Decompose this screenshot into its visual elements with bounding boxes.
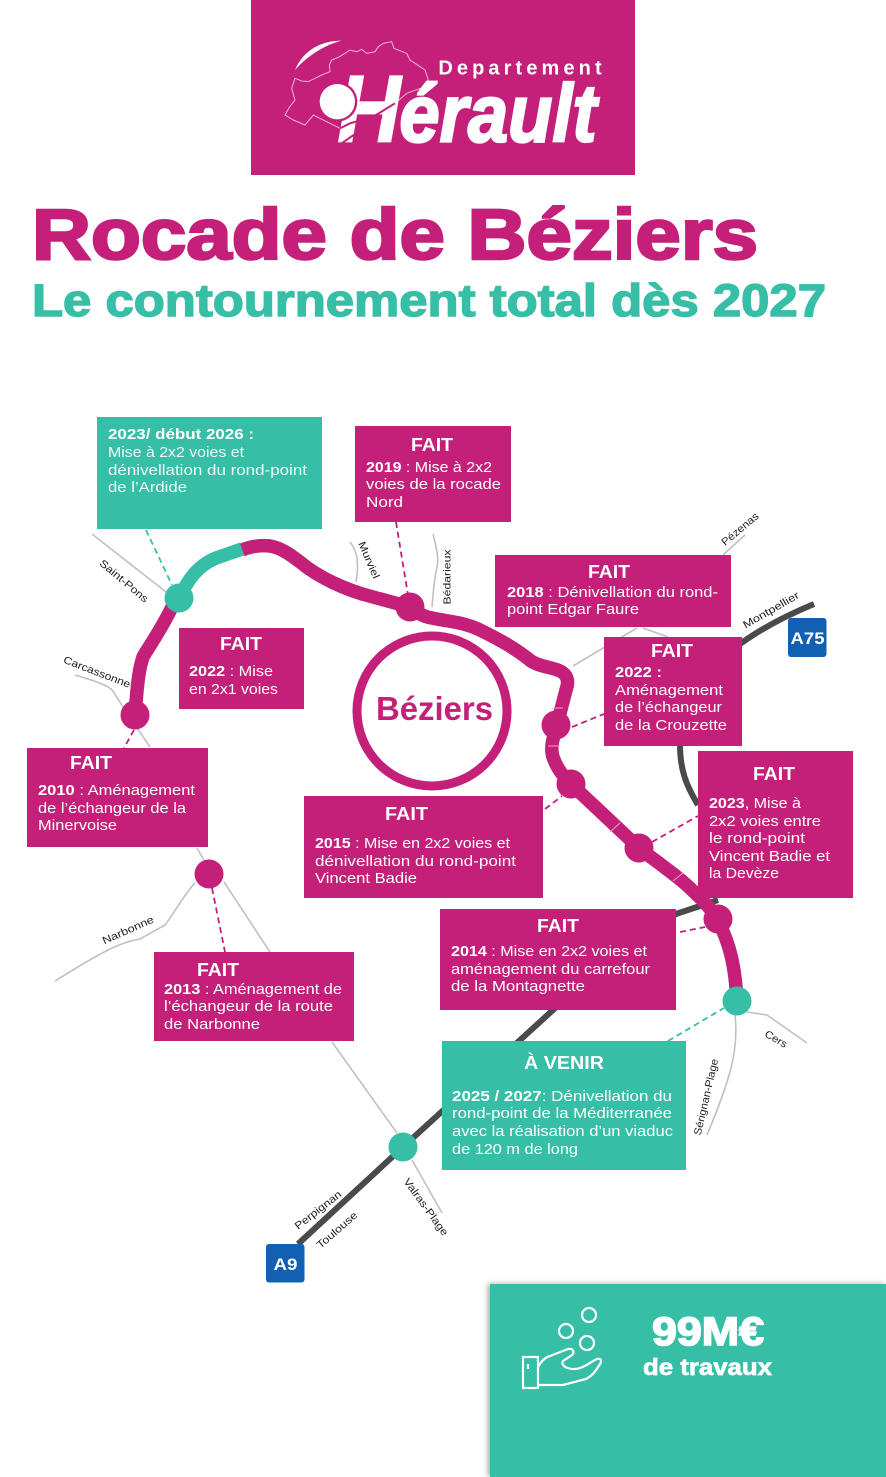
- panel: 2019 rocade Nord: [355, 426, 511, 522]
- panel: 2015 Vincent Badie: FAIT: [385, 803, 429, 824]
- icon: hand with coins: [523, 1308, 601, 1388]
- panel: 2010 la Minervoise: [27, 748, 208, 847]
- panel: 2019 rocade Nord: 2019 : Mise à 2x2: [366, 459, 492, 476]
- panel: 2015 Vincent Badie: [304, 796, 543, 898]
- panel: 2019 rocade Nord: voies de la rocade: [366, 476, 501, 493]
- panel: à venir 2025 / 2027 Méditerranée: À VENIR: [524, 1052, 604, 1073]
- logo: Département Hérault: H: [337, 57, 403, 163]
- interchange nodes: [120, 584, 752, 1162]
- panel: 2022 mise en 2x1 voies: FAIT: [220, 633, 263, 654]
- secondary roads: [55, 534, 807, 1213]
- road labels: Narbonne: [101, 914, 156, 947]
- panel: 2015 Vincent Badie: Vincent Badie: [315, 870, 417, 887]
- road labels: Sérignan-Plage: [692, 1058, 721, 1136]
- panel: 2013 route de Narbonne: l’échangeur de la route: [164, 998, 333, 1015]
- panel: 2022 mise en 2x1 voies: [179, 628, 304, 709]
- road labels: [62, 510, 802, 1251]
- budget amount: 99M€: [652, 1310, 764, 1354]
- panel: 2023 / début 2026 Ardide: dénivellation du rond-point: [108, 462, 308, 479]
- logo: Département Hérault: érault: [399, 69, 599, 160]
- panel: 2022 la Crouzette: de l’échangeur: [615, 699, 722, 716]
- road labels: Carcassonne: [62, 654, 132, 691]
- rocade: completed sections: [135, 546, 737, 1001]
- road labels: Saint-Pons: [97, 558, 151, 605]
- panel: 2018 Edgar Faure: 2018 : Dénivellation du rond-: [507, 584, 718, 601]
- road labels: Murviel: [355, 540, 382, 580]
- motorway A9: [298, 900, 718, 1244]
- rocade: section in progress: [179, 549, 242, 598]
- road labels: Montpellier: [741, 589, 802, 631]
- panel: 2022 la Crouzette: 2022 :: [615, 664, 662, 681]
- panel: 2013 route de Narbonne: FAIT: [197, 959, 240, 980]
- panel: 2013 route de Narbonne: 2013 : Aménagement de: [164, 981, 342, 998]
- panel: 2018 Edgar Faure: FAIT: [588, 561, 631, 582]
- panel: budget: [490, 1284, 886, 1477]
- motorway sign A75: A75: [790, 629, 824, 648]
- panel: 2023 Vincent Badie / la Devèze: 2023, Mise à: [709, 795, 802, 812]
- panel: 2022 mise en 2x1 voies: 2022 : Mise: [189, 663, 273, 680]
- panel: 2018 Edgar Faure: point Edgar Faure: [507, 601, 639, 618]
- logo: Département Hérault: Departement: [438, 58, 602, 80]
- road labels: Valras-Plage: [401, 1176, 451, 1238]
- panel: 2013 route de Narbonne: [154, 952, 354, 1041]
- panel: 2015 Vincent Badie: dénivellation du rond-point: [315, 853, 517, 870]
- road labels: Pézenas: [719, 510, 761, 548]
- panel: 2022 la Crouzette: de la Crouzette: [615, 717, 727, 734]
- panel: 2010 la Minervoise: de l’échangeur de la: [38, 800, 187, 817]
- budget caption: de travaux: [643, 1354, 772, 1380]
- motorway sign A9: A9: [274, 1255, 298, 1274]
- motorway sign A9: [266, 1244, 304, 1282]
- panel: 2018 Edgar Faure: [495, 555, 731, 627]
- panel: 2023 / début 2026 Ardide: [97, 417, 322, 529]
- panel: à venir 2025 / 2027 Méditerranée: de 120 m de long: [452, 1141, 578, 1158]
- panel: à venir 2025 / 2027 Méditerranée: [442, 1041, 686, 1170]
- panel: à venir 2025 / 2027 Méditerranée: avec la réalisation d’un viaduc: [452, 1123, 674, 1140]
- panel: 2015 Vincent Badie: 2015 : Mise en 2x2 voies et: [315, 835, 511, 852]
- panel: à venir 2025 / 2027 Méditerranée: rond-point de la Méditerranée: [452, 1105, 672, 1122]
- panel: 2022 la Crouzette: Aménagement: [615, 682, 724, 699]
- panel: 2010 la Minervoise: FAIT: [70, 752, 113, 773]
- Béziers city marker: Béziers: [376, 690, 493, 727]
- panel: 2014 la Montagnette: de la Montagnette: [451, 978, 585, 995]
- panel: 2023 Vincent Badie / la Devèze: le rond-point: [709, 830, 806, 847]
- subtitle: Le contournement total dès 2027: [32, 275, 826, 326]
- panel: 2023 Vincent Badie / la Devèze: Vincent Badie et: [709, 848, 831, 865]
- panel: à venir 2025 / 2027 Méditerranée: 2025 / 2027 : Dénivellation du: [452, 1088, 672, 1105]
- panel: 2022 la Crouzette: [604, 637, 742, 746]
- panel: 2019 rocade Nord: Nord: [366, 494, 403, 511]
- logo: Département Hérault: [251, 0, 635, 175]
- panel: 2022 la Crouzette: FAIT: [651, 640, 694, 661]
- dashed connectors: [124, 522, 724, 1041]
- panel: 2023 / début 2026 Ardide: Mise à 2x2 voies et: [108, 444, 245, 461]
- road labels: Perpignan: [293, 1188, 344, 1232]
- Béziers city marker: [357, 636, 507, 786]
- panel: 2010 la Minervoise: Minervoise: [38, 817, 117, 834]
- panel: 2023 Vincent Badie / la Devèze: 2x2 voies entre: [709, 813, 821, 830]
- panel: 2014 la Montagnette: 2014 : Mise en 2x2 voies et: [451, 943, 648, 960]
- panel: 2023 Vincent Badie / la Devèze: [698, 751, 853, 898]
- motorway sign A75: [788, 618, 826, 657]
- panel: 2023 Vincent Badie / la Devèze: FAIT: [753, 763, 796, 784]
- panel: 2014 la Montagnette: aménagement du carrefour: [451, 961, 650, 978]
- panel: 2010 la Minervoise: 2010 : Aménagement: [38, 782, 196, 799]
- road labels: Toulouse: [315, 1209, 360, 1251]
- motorway A75: [680, 604, 814, 805]
- road labels: Bédarieux: [442, 549, 454, 605]
- title: Rocade de Béziers: [32, 196, 758, 275]
- panel: 2014 la Montagnette: [440, 909, 676, 1010]
- panel: 2014 la Montagnette: FAIT: [537, 915, 580, 936]
- panel: 2023 / début 2026 Ardide: de l’Ardide: [108, 479, 187, 496]
- panel: 2019 rocade Nord: FAIT: [411, 434, 454, 455]
- road joints: [548, 708, 683, 881]
- map: rocade de Béziers: [55, 510, 826, 1282]
- panel: 2022 mise en 2x1 voies: en 2x1 voies: [189, 681, 278, 698]
- panel: 2023 Vincent Badie / la Devèze: la Devèze: [709, 865, 779, 882]
- road labels: Cers: [762, 1028, 789, 1051]
- panel: 2013 route de Narbonne: de Narbonne: [164, 1016, 260, 1033]
- panel: 2023 / début 2026 Ardide: 2023/ début 2026 :: [108, 426, 254, 443]
